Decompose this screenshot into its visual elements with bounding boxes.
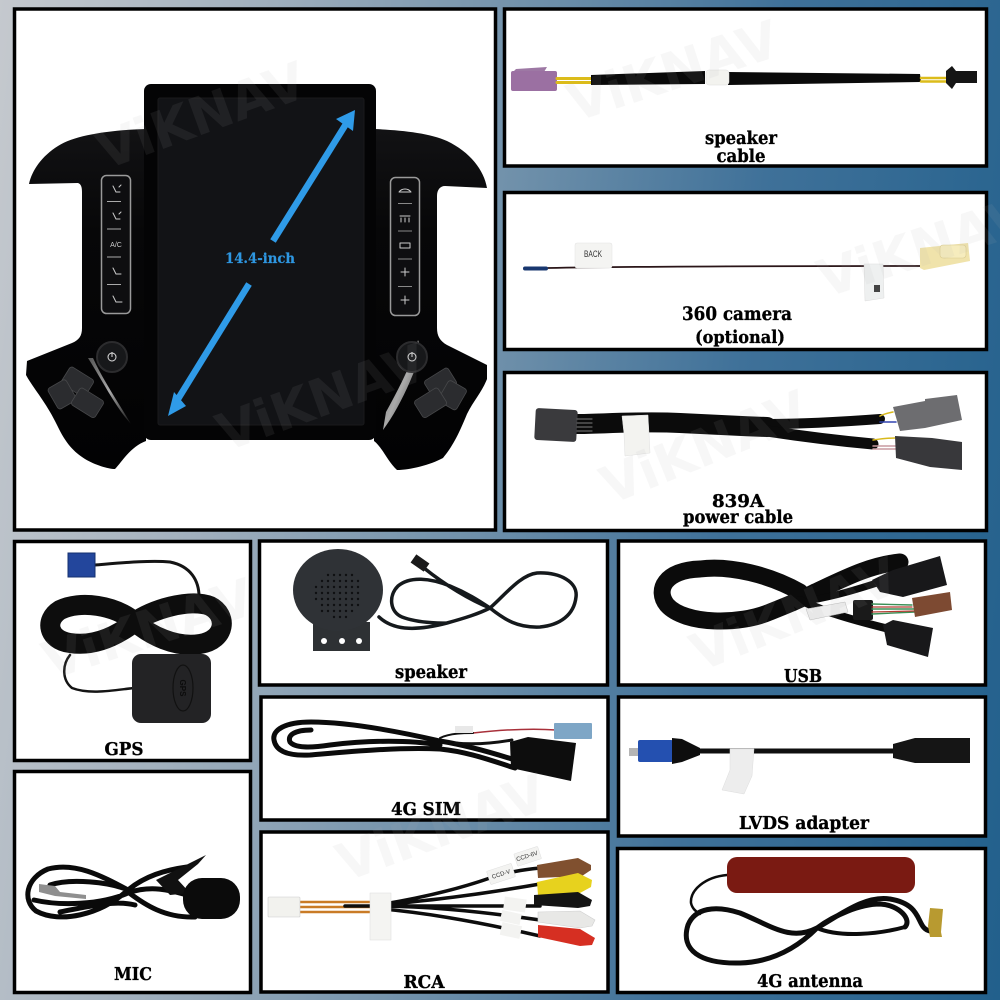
harness tag	[622, 415, 650, 456]
label: speaker cable: cable	[716, 147, 766, 167]
wire tag	[864, 264, 884, 301]
device: right button strip	[390, 178, 420, 316]
speaker disc	[293, 549, 383, 631]
right plug	[946, 66, 977, 89]
cream connector	[920, 243, 970, 270]
antenna lead	[691, 875, 727, 914]
SIM thin lead	[455, 740, 512, 744]
black cable	[591, 71, 921, 85]
SIM box	[510, 737, 576, 781]
size label: 14.4-inch	[225, 251, 295, 267]
LVDS tip	[629, 748, 640, 756]
watermarks: ViKNAV	[682, 547, 907, 684]
panel: 4G SIM	[261, 697, 608, 820]
label: LVDS adapter: LVDS adapter	[739, 814, 870, 834]
device: right power knob	[397, 342, 427, 372]
USB brown connector	[912, 592, 952, 617]
RCA audio tags	[500, 897, 527, 939]
device: left seat buttons	[47, 366, 105, 419]
device: left button strip	[102, 176, 130, 314]
purple connector	[511, 67, 557, 91]
GPS antenna: GPS	[178, 680, 187, 697]
arrow: size upper	[273, 110, 355, 241]
USB red wires	[872, 607, 914, 612]
label: power cable: power cable	[683, 508, 793, 528]
device: silver trim left	[88, 358, 131, 424]
SIM dark wire	[440, 733, 473, 738]
RCA white plug 2	[538, 911, 595, 928]
dark connector	[895, 436, 962, 470]
SIM blue connector	[554, 723, 592, 739]
device: silver trim right	[383, 340, 422, 430]
device: screen bezel	[144, 84, 376, 440]
LVDS boot	[672, 738, 700, 764]
RCA left wires	[300, 902, 370, 912]
RCA white plug	[268, 897, 300, 917]
RCA brown plug	[537, 858, 591, 878]
pink wires	[873, 446, 897, 449]
panel: speaker cable	[504, 9, 986, 167]
LVDS tag	[722, 749, 754, 794]
label: optional: (optional)	[695, 327, 785, 348]
mic foam	[183, 878, 240, 919]
device: left wing	[26, 129, 146, 469]
yellow wires	[557, 78, 592, 82]
USB QR tag	[806, 602, 848, 620]
panel: 4G antenna	[618, 848, 986, 992]
RCA red plug	[538, 925, 595, 946]
label: 4G SIM: 4G SIM	[391, 800, 461, 820]
mic clip	[156, 855, 206, 895]
power harness	[577, 419, 880, 444]
blue probe	[523, 266, 548, 270]
device: left button strip: A/C	[110, 242, 122, 249]
LVDS right connector	[893, 738, 970, 763]
GPS connector	[68, 553, 95, 577]
SIM cable coil	[274, 722, 515, 768]
USB upper plug	[872, 556, 947, 597]
LVDS blue connector	[638, 740, 673, 762]
USB lower plug	[883, 620, 933, 657]
lower wires	[873, 438, 895, 440]
panel: head unit	[14, 9, 496, 530]
label: speaker cable	[705, 129, 778, 167]
label: GPS: GPS	[104, 740, 144, 760]
panel: USB	[618, 541, 986, 687]
mic cable coil	[28, 867, 195, 917]
label: 4G antenna: 4G antenna	[757, 972, 863, 992]
label: MIC: MIC	[114, 965, 152, 985]
GPS antenna	[132, 654, 211, 723]
RCA CCD-V tag	[486, 863, 516, 885]
RCA black plug	[534, 892, 592, 908]
panel: 839A power cable	[504, 372, 986, 530]
RCA harness tag	[370, 893, 391, 940]
cable label	[706, 70, 729, 85]
GPS coil	[50, 603, 222, 645]
antenna gold connector	[928, 908, 943, 937]
left connector	[534, 408, 578, 442]
top blue wire	[880, 421, 896, 423]
RCA CCD-6V tag: CCD-6V	[516, 851, 539, 863]
USB wires	[872, 604, 915, 614]
LVDS cable	[698, 748, 894, 754]
watermarks: ViKNAV	[35, 568, 261, 692]
GPS lead	[95, 561, 199, 600]
watermarks: ViKNAV	[89, 51, 314, 182]
SIM wire tag	[455, 726, 473, 733]
arrow: size lower	[168, 284, 249, 416]
BACK tag	[575, 243, 612, 268]
RCA CCD-V tag: CCD-V	[491, 869, 511, 881]
label: speaker: speaker	[395, 663, 468, 683]
RCA CCD-6V tag	[514, 846, 542, 866]
speaker bracket	[313, 622, 370, 651]
label: speaker cable: speaker	[705, 129, 778, 149]
panel: RCA	[261, 832, 608, 993]
SIM colored wires	[473, 729, 556, 733]
watermarks: ViKNAV	[209, 333, 434, 464]
panel: 360 camera	[504, 192, 986, 350]
device: right seat buttons	[413, 367, 468, 419]
panel: speaker	[260, 541, 608, 685]
panel: GPS	[14, 542, 250, 760]
speaker plug	[411, 554, 429, 572]
panel: MIC	[14, 772, 250, 992]
RCA harness	[345, 868, 540, 936]
speaker wire	[379, 568, 576, 628]
antenna red bar	[727, 857, 915, 893]
panel: LVDS adapter	[618, 697, 986, 836]
device: left power knob	[97, 342, 127, 372]
gray connector	[893, 395, 962, 431]
USB boot	[853, 600, 873, 620]
watermarks: ViKNAV	[329, 763, 554, 894]
device: right wing	[374, 129, 487, 470]
left wires	[577, 419, 592, 431]
device: screen	[158, 98, 364, 425]
watermarks: ViKNAV	[560, 10, 786, 134]
mic plug	[39, 884, 86, 899]
antenna lead	[64, 655, 134, 692]
RCA yellow plug	[537, 873, 592, 895]
label: USB: USB	[784, 667, 822, 687]
top wires	[880, 412, 893, 416]
right wires	[921, 78, 946, 82]
label: RCA: RCA	[404, 973, 445, 993]
label: 360 camera: 360 camera	[682, 303, 792, 325]
watermarks: ViKNAV	[592, 380, 817, 517]
camera wire	[548, 266, 927, 268]
antenna coil	[686, 898, 930, 963]
USB coil	[662, 562, 900, 628]
label: 839A: 839A	[712, 492, 764, 512]
BACK tag: BACK	[584, 249, 602, 259]
